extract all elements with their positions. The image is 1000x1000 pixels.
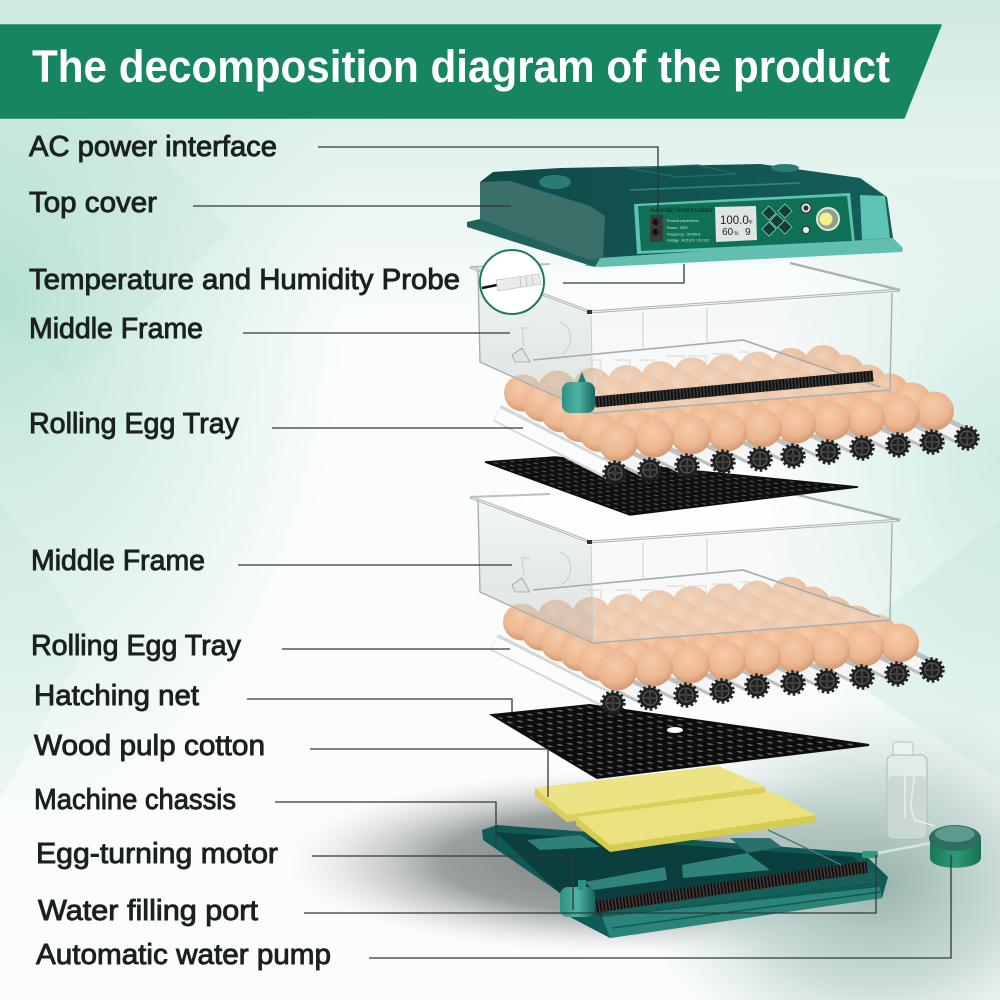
label: Water filling port: Water filling port [38,895,258,927]
label: Automatic water pump: Automatic water pump [36,939,331,971]
display: ℉ [748,220,753,226]
label: Rolling Egg Tray: Rolling Egg Tray [29,408,240,440]
leader: probe [563,264,684,283]
title banner [0,25,941,118]
leader: top cover [193,205,511,207]
control panel: Power : 50W [667,226,688,230]
control panel: Frequency : 50-60Hz [667,232,701,236]
label: AC power interface: AC power interface [29,131,277,163]
label: Middle Frame 2: Middle Frame [31,545,205,577]
rolling egg tray upper [497,345,978,484]
label: Wood pulp cotton: Wood pulp cotton [34,730,265,762]
top cover [467,164,903,267]
leader: middle frame [243,332,510,334]
leader: wood pulp cotton [310,749,548,797]
title: The decomposition diagram of the product [32,41,890,92]
leader: automatic water pump [369,855,951,958]
label: Middle Frame: Middle Frame [29,313,203,345]
temperature and humidity probe [480,250,544,314]
motor [560,880,595,917]
label: Hatching net: Hatching net [34,680,199,712]
machine chassis [482,825,888,938]
water filling port [862,851,878,858]
leader: rolling egg tray [272,427,523,429]
leader: machine chassis [275,802,496,846]
display: 60 [722,227,734,238]
label: Machine chassis: Machine chassis [34,784,236,816]
label: Top cover: Top cover [29,187,158,219]
water tube [878,840,947,853]
leader: rolling egg tray 2 [282,648,510,650]
leader: middle frame 2 [238,564,512,566]
control panel [634,193,855,254]
water bottle [887,742,935,839]
label: Rolling Egg Tray 2: Rolling Egg Tray [31,630,242,662]
leader: water filling port [304,855,876,913]
label: Temperature and Humidity Probe: Temperature and Humidity Probe [29,264,460,296]
control panel: Voltage : AC110V / DC12V [667,238,710,242]
middle frame lower [470,493,900,643]
automatic water pump [929,825,981,868]
rolling egg tray lower [494,577,944,714]
hatching net [492,705,869,778]
leader: AC power interface [318,147,658,235]
control panel: Product parameters [667,219,699,223]
egg-turning screw and motor upper [562,372,873,413]
middle frame upper [470,263,900,413]
screw [595,867,867,907]
display: 9 [745,227,751,238]
display [715,206,757,242]
control panel: Automatic Smart Incubator [650,207,713,214]
display: 100.0 [720,215,749,227]
display: % [734,231,739,237]
buttons [762,204,792,236]
leader: egg-turning motor [312,856,573,910]
label: Egg-turning motor: Egg-turning motor [36,838,279,870]
leader: hatching net [247,699,512,712]
hatching net upper [485,457,858,515]
wood pulp cotton [535,766,816,852]
